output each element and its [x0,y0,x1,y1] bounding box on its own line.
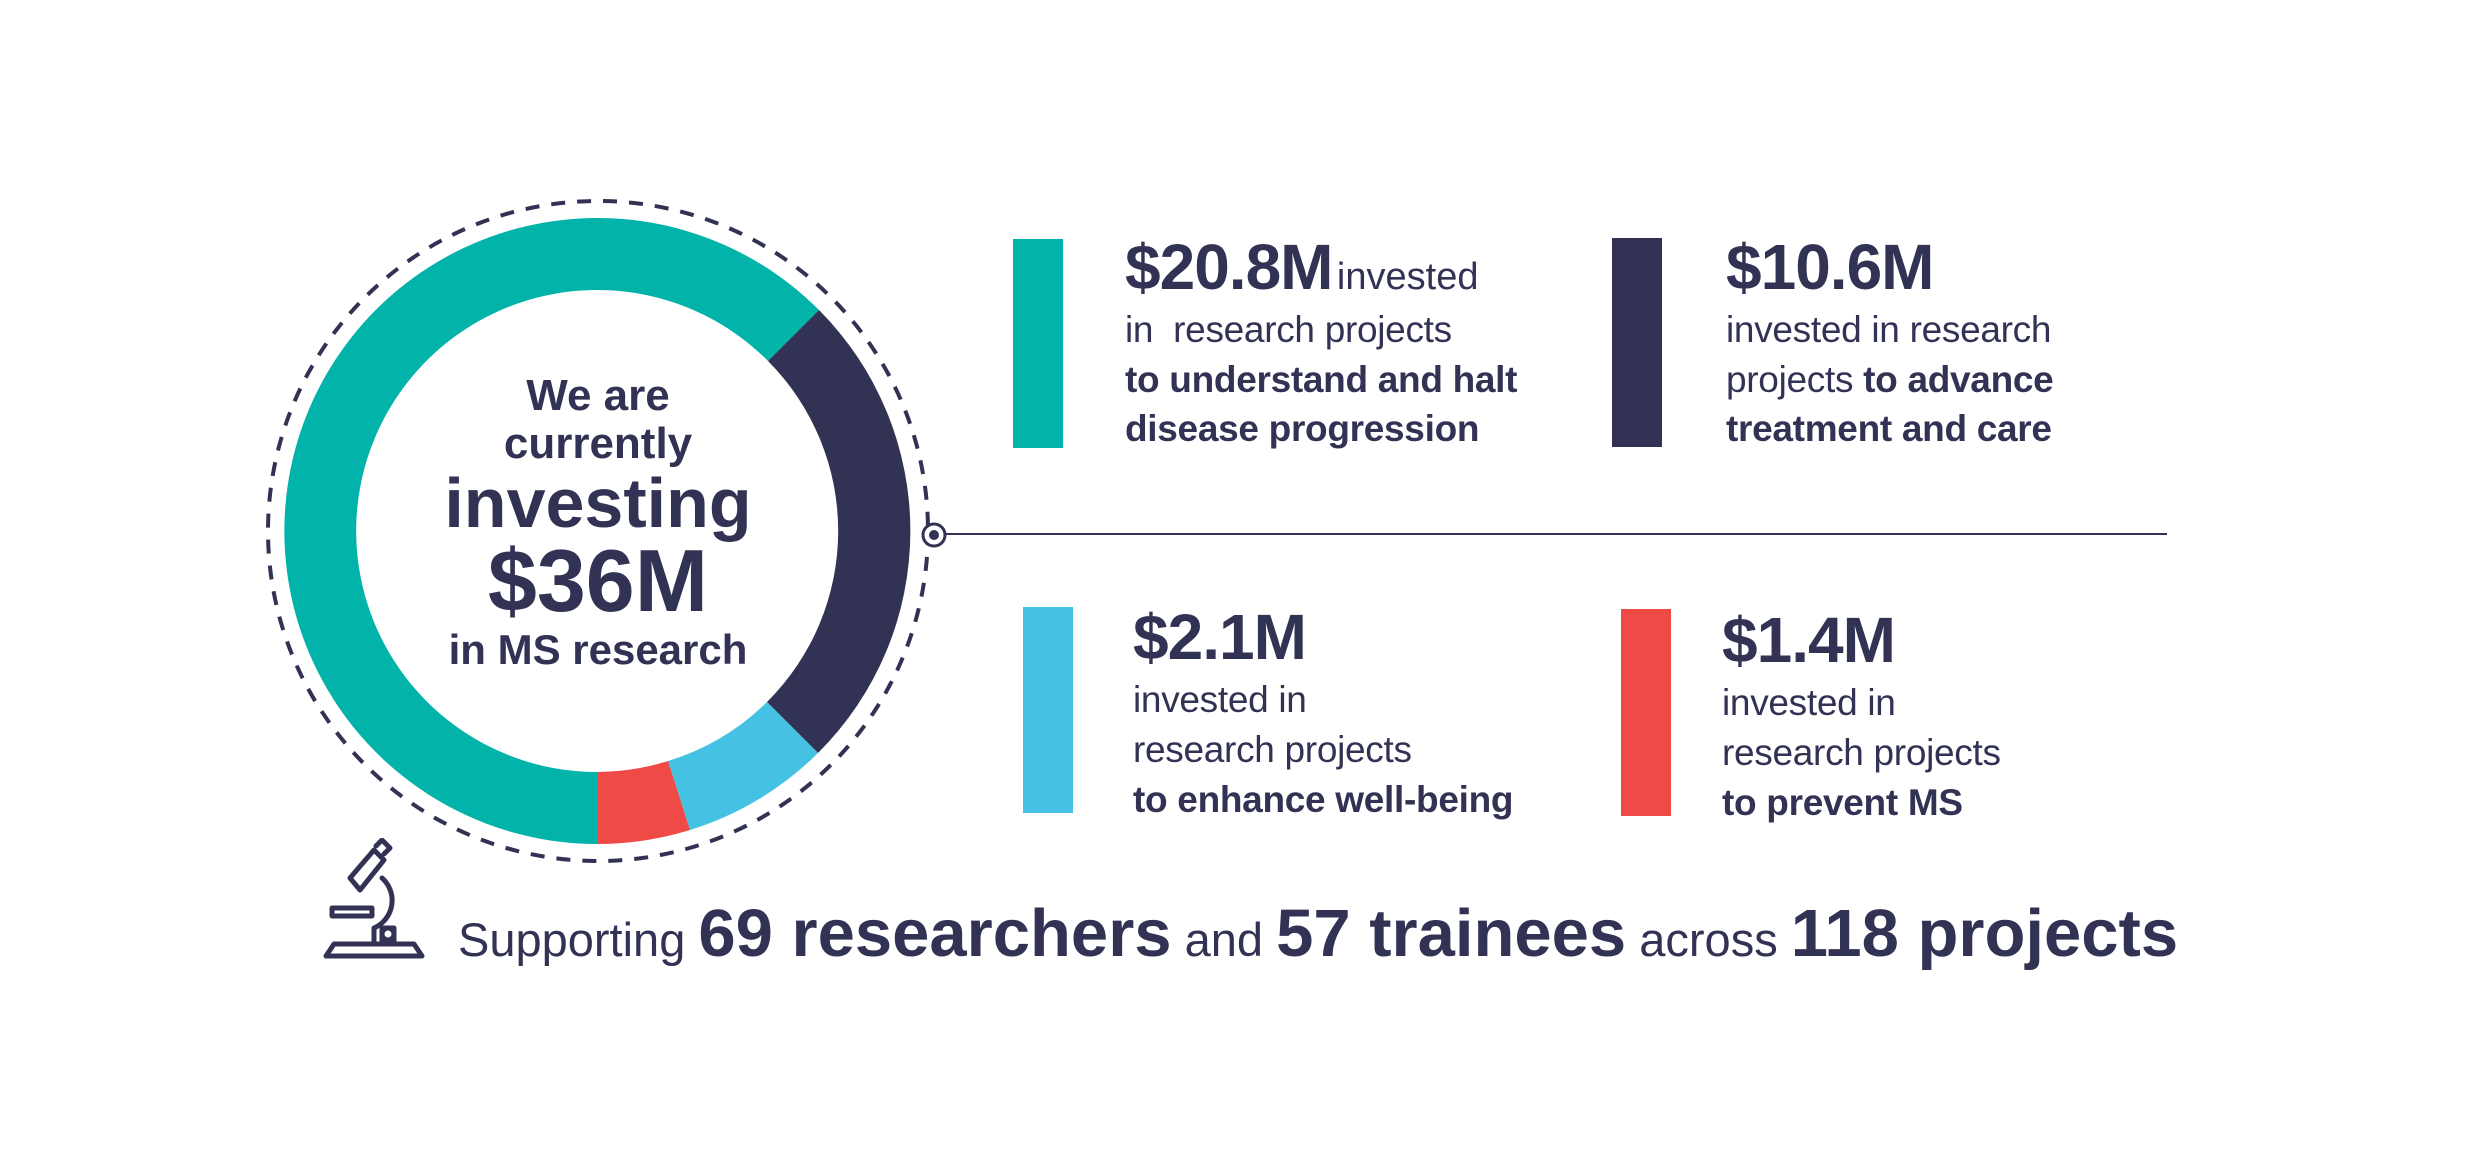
segment: light blue [668,702,818,830]
segment: navy [767,310,910,753]
bottom summary text: 69 researchers [698,896,1172,971]
text block: $2.1M: to enhance well-being [1133,779,1513,820]
segment: teal [284,218,819,844]
donut center text: currently [504,419,692,468]
text block: $1.4M: $1.4M [1722,604,1895,676]
donut center text: We are [526,371,670,420]
donut center text: investing [444,464,752,542]
text block: $2.1M: $2.1M [1133,601,1306,673]
text block: $1.4M [1722,604,2001,823]
bottom summary text [458,896,2178,971]
bottom summary text: and [1185,913,1263,966]
bar: red [1621,609,1671,816]
bottom summary text: Supporting [458,913,685,966]
bottom summary text: across [1639,913,1778,966]
dashed outer ring [268,201,928,861]
text block: $10.6M: treatment and care [1726,408,2052,449]
text block: $20.8M: $20.8M invested [1125,231,1478,303]
bottom summary text: 118 projects [1791,896,2178,971]
bottom summary text: 57 trainees [1276,896,1626,971]
donut center text: in MS research [449,626,747,673]
donut center text [444,371,752,673]
text block: $2.1M: invested in [1133,679,1307,720]
text block: $1.4M: to prevent MS [1722,782,1963,823]
text block: $10.6M: projects to advance [1726,359,2053,400]
text block: $1.4M: invested in [1722,682,1896,723]
text block: $10.6M [1726,231,2053,449]
connector dot [923,524,945,546]
text block: $1.4M: research projects [1722,732,2001,773]
text block: $20.8M [1125,231,1517,449]
text block: $10.6M: invested in research [1726,309,2051,350]
donut center text: $36M [488,531,708,630]
text block: $20.8M: disease progression [1125,408,1479,449]
bar: navy [1612,238,1662,447]
bar: teal [1013,239,1063,448]
donut chart [266,199,946,863]
bar: light blue [1023,607,1073,813]
connector line [945,533,2167,535]
text block: $10.6M: $10.6M [1726,231,1933,303]
text block: $2.1M: research projects [1133,729,1412,770]
text block: $20.8M: in research projects [1125,309,1452,350]
icon: microscope [324,838,424,958]
text block: $2.1M [1133,601,1513,820]
text block: $20.8M: to understand and halt [1125,359,1517,400]
segment: red [598,761,690,844]
